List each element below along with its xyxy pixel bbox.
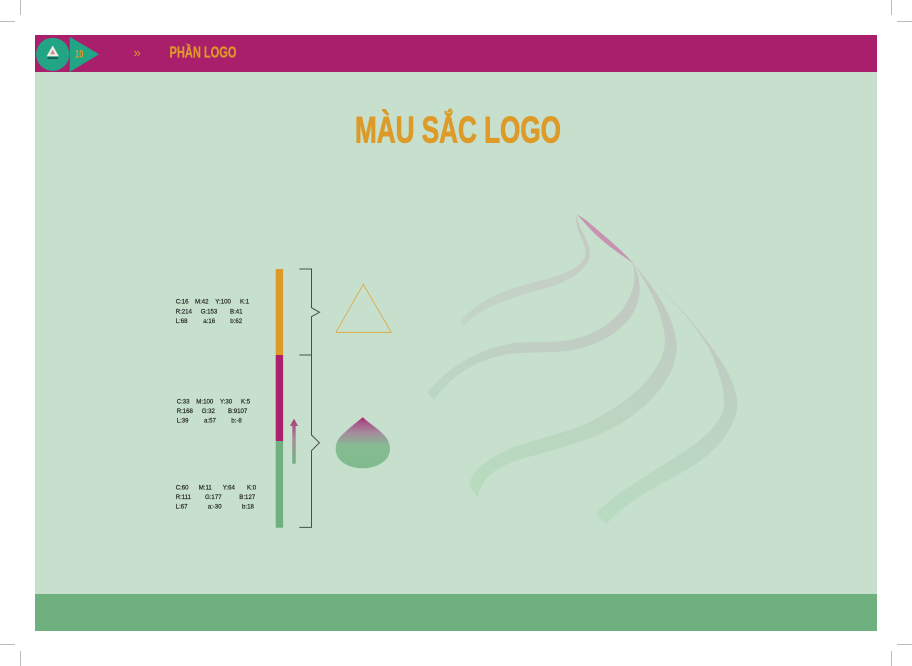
colour codes: magenta: M:100 [196,399,214,406]
colour codes: orange: L:68 [176,318,188,325]
colour codes: green: C:60 [176,484,189,491]
colour codes: magenta: K:5 [241,399,251,406]
footer band [35,594,877,631]
header band [35,35,877,72]
colour codes: magenta: Y:30 [220,399,233,406]
colour codes: magenta: G:32 [202,408,216,415]
bracket: lower [299,355,319,527]
colour codes: magenta: C:33 [177,399,190,406]
colour codes: magenta: B:9107 [228,408,248,415]
colour codes: magenta: R:168 [177,408,194,415]
colour codes: magenta: b:-8 [231,418,242,425]
colour bar [276,269,283,528]
colour codes: green: K:0 [247,484,257,491]
colour codes: magenta: L:39 [177,418,189,425]
colour codes: orange: C:16 [176,299,189,306]
ribbon 1 [460,215,590,326]
colour codes: green: L:67 [176,504,188,511]
bracket: upper [299,269,320,355]
icon: logo badge [36,38,69,71]
colour codes: green: R:111 [176,494,192,501]
ribbon 4 [596,263,737,524]
colour codes: green: B:127 [239,494,256,501]
colour codes: green: a:-30 [208,504,222,511]
colour codes: orange: K:1 [240,299,250,306]
colour codes: green: G:177 [205,494,222,501]
colour codes: green: Y:64 [223,484,236,491]
colour codes: orange: a:16 [203,318,216,325]
page number arrow: 10 [75,48,84,60]
colour codes: orange: R:214 [176,309,193,316]
icon: triangle outline [336,284,391,332]
colour codes: magenta [177,399,251,425]
colour codes: orange: B:41 [230,309,243,316]
colour codes: orange: M:42 [195,299,209,306]
colour codes: orange: b:62 [230,318,243,325]
colour codes: green [176,484,257,511]
upward gradient arrow [290,419,298,464]
page number arrow [70,37,99,72]
colour codes: orange: G:153 [201,309,218,316]
decorative lotus ribbons [427,214,737,524]
ribbon 2 [427,262,640,400]
colour codes: magenta: a:57 [204,418,216,425]
chevron separator: » [134,45,141,60]
colour codes: orange [176,299,250,325]
colour codes: green: b:18 [242,504,254,511]
ribbon tip [577,214,633,263]
colour codes: orange: Y:100 [215,299,231,306]
ribbon 3 [469,263,677,498]
title: MÀU SẮC LOGO [355,108,561,150]
colour codes: green: M:11 [199,484,212,491]
icon: lotus bud [336,417,390,468]
section heading: PHẦN LOGO [170,42,236,62]
